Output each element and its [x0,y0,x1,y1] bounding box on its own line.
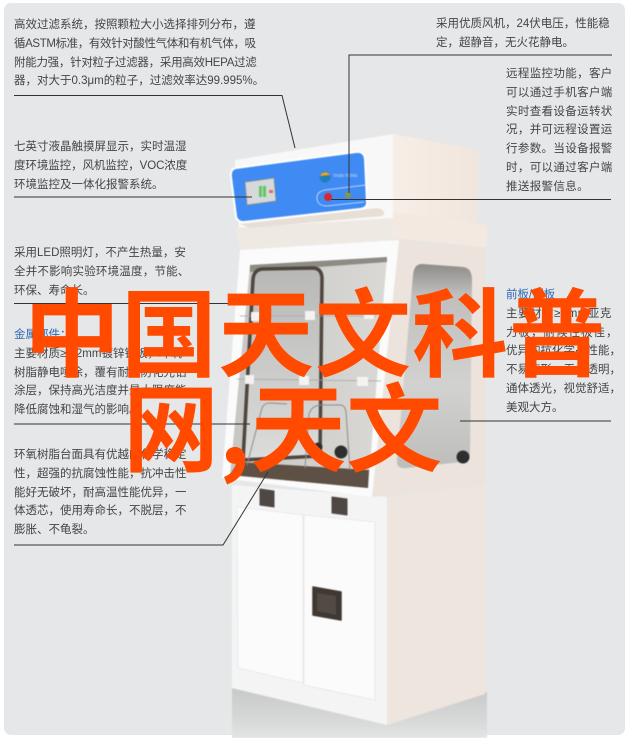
side window [397,264,472,468]
lower base cabinet [232,484,485,725]
text: fan: 定，超静音，无火花静电。 [436,37,574,49]
text: front and side panels [506,288,621,414]
text: fan [436,17,610,49]
text: epoxy work surface: 膨胀、不龟裂。 [14,524,94,536]
text: front and side panels: 不易变形，无色透明， [506,364,621,376]
text: touch screen: 七英寸液晶触摸屏显示，实时温湿 [14,141,186,153]
button group [317,185,366,206]
logo [320,172,330,182]
text: front and side panels: 力板，耐候性极佳， [506,326,618,338]
text: remote monitoring: 可以通过手机客户端 [506,87,613,99]
chamber side panel [372,240,485,497]
text: epoxy work surface: 能好无破坏，耐高温性能优异，一 [14,486,186,498]
text: metal parts: 涂层，保持高光洁度并最大限度能 [14,385,186,397]
text: front and side panels: 优异的抗化学品性能， [506,345,621,357]
chamber interior [230,257,387,488]
text: front and side panels: 通体透光，视觉舒适， [506,383,621,395]
title line 1: 中国天文科普 [24,258,606,397]
text: remote monitoring: 况，并可远程设置运 [506,124,613,136]
text: fan: 采用优质风机，24伏电压，性能稳 [436,18,610,30]
text: metal parts: 主要材质≥1.2mm镀锌钢板，环氧 [14,348,182,360]
door handle right [332,497,347,515]
panel shadow [240,208,384,228]
text: remote monitoring: 时，可以通过客户端 [506,162,613,174]
text: metal parts: 降低腐蚀和湿气的影响。 [14,404,140,416]
front frame [222,240,399,497]
top housing [231,134,487,250]
touch screen [245,178,276,205]
text: LED lighting [14,246,190,296]
text: touch screen: 环境监控及一体化报警系统。 [14,178,164,190]
text: metal parts: 金属部件： [14,329,72,341]
text: touch screen: 度环境监控，风机监控，VOC浓度 [14,160,187,172]
floor reflection [232,688,487,738]
text: metal parts [14,328,186,416]
text: LED lighting: 环保、寿命长。 [14,284,94,296]
title overlay [24,258,606,492]
text: remote monitoring: 推送报警信息。 [506,180,589,192]
text: remote monitoring [506,67,613,192]
text: filtration system: 附能力强，针对粒子过滤器，采用高效HEPA过滤 [14,56,257,68]
text: filtration system: 高效过滤系统，按照颗粒大小选择排列分布，遵 [14,19,256,31]
text: epoxy work surface [14,448,186,536]
text: filtration system: 循ASTM标准，有效针对酸性气体和有机气体，吸 [14,38,256,50]
text: metal parts: 树脂静电喷涂，覆有耐用防化光铝 [14,366,186,378]
title line 2: 网,天文 [123,353,442,492]
text: front and side panels: 美观大方。 [506,402,564,414]
work surface strip [230,462,369,488]
text: front and side panels: 前板/侧板 [506,289,555,301]
glove ports [314,442,470,464]
text: filtration system [14,18,264,87]
text: remote monitoring: 行参数。当设备报警 [506,143,613,155]
text: front and side panels: 主要材质≥5mm亚克 [506,308,612,320]
text: remote monitoring: 远程监控功能，客户 [506,68,613,80]
left door [237,507,303,683]
text: epoxy work surface: 体透芯，使用寿命长，不脱层，不 [14,505,186,517]
text: LED lighting: 采用LED照明灯，不产生热量，安 [14,247,186,259]
control panel [231,152,367,222]
door handle left [260,489,274,507]
ledge under panel [235,218,393,250]
sash rails and clips [237,311,381,386]
interior shadow at top [250,257,387,272]
text: remote monitoring: 实时查看设备运转状 [506,106,613,118]
brand text: TAISI FENG [333,173,358,178]
glove port outlines [247,403,350,470]
text: epoxy work surface: 环氧树脂台面具有优越的化学稳定 [14,449,186,461]
door lock [313,587,341,620]
middle chamber [222,240,485,497]
sash outline [243,268,322,460]
right door [304,515,375,700]
text: touch screen [14,140,187,190]
text: filtration system: 器，对大于0.3μm的粒子，过滤效率达99.995%。 [14,75,264,87]
text: LED lighting: 全并不影响实验环境温度，节能、 [14,266,190,278]
text: epoxy work surface: 性，超强的抗腐蚀性能，抗冲击性 [14,468,186,480]
